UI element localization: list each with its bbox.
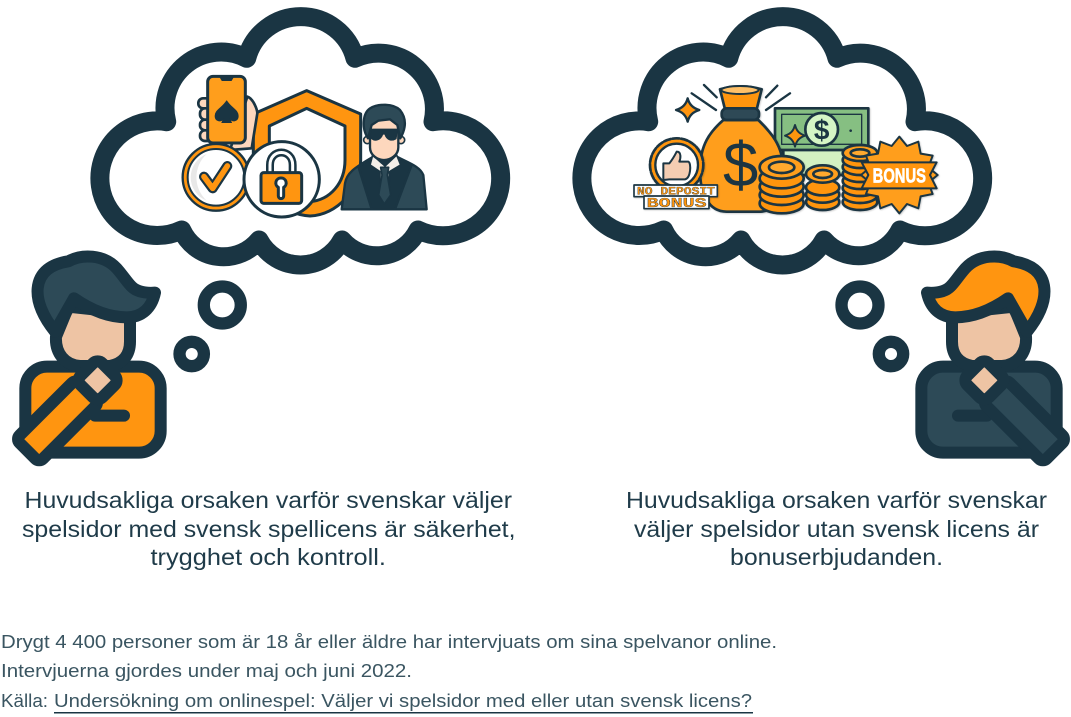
icon: no deposit bonus badge <box>634 138 717 212</box>
icon: hand holding phone <box>198 76 257 150</box>
person body <box>921 367 1057 453</box>
text block: right caption: bonuserbjudanden. <box>730 544 943 570</box>
person face <box>952 307 1026 366</box>
thought cloud right <box>582 17 983 265</box>
icon: padlock <box>244 142 319 217</box>
person hair <box>927 256 1044 332</box>
icon: security illustration <box>183 76 427 217</box>
icon: shield <box>253 91 361 216</box>
character: thinking person with orange hair <box>921 256 1066 463</box>
icon: bodyguard <box>342 105 427 209</box>
icon: bonus starburst <box>861 137 938 213</box>
person face <box>56 307 130 366</box>
text block: left caption: Huvudsakliga orsaken varför svenskar väljer <box>24 487 512 513</box>
icon: coin stacks <box>760 145 877 213</box>
icon: sparkle and rays <box>676 85 790 122</box>
icon: no deposit bonus badge: NO DEPOSIT <box>637 186 716 198</box>
thought cloud left <box>100 17 501 265</box>
thought bubble large left <box>204 286 241 324</box>
person forearm <box>983 379 1066 463</box>
icon: check badge <box>183 144 249 211</box>
icon: bonus illustration <box>634 85 938 213</box>
text block: right caption: väljer spelsidor utan svensk licens är <box>634 516 1039 542</box>
icon: banknote: $ <box>814 114 830 145</box>
text block: survey notes and source <box>1 631 777 714</box>
icon: money bag: $ <box>723 131 758 201</box>
icon: bonus starburst: BONUS <box>873 166 926 188</box>
person forearm <box>16 379 99 463</box>
text block: left caption: spelsidor med svensk spellicens är säkerhet, <box>22 516 516 542</box>
text block: left caption: trygghet och kontroll. <box>150 544 386 570</box>
person hand <box>963 359 1006 402</box>
person sleeve line <box>958 398 987 434</box>
thought bubble small left <box>180 342 204 366</box>
icon: no deposit bonus badge: BONUS <box>647 196 707 212</box>
person body <box>25 367 161 453</box>
thought bubble small right <box>879 342 903 366</box>
icon: money bag <box>700 86 783 212</box>
text block: right caption <box>626 487 1047 570</box>
thought bubble large right <box>842 286 878 324</box>
text block: survey notes and source: Drygt 4 400 personer som är 18 år eller äldre har intervjuats om sina spelvanor online. <box>1 631 777 652</box>
person hand <box>76 359 119 402</box>
icon: banknote <box>775 108 868 175</box>
text block: survey notes and source: Intervjuerna gjordes under maj och juni 2022. <box>1 660 412 681</box>
text block: survey notes and source: Undersökning om onlinespel: Väljer vi spelsidor med eller utan svensk licens? <box>54 690 752 711</box>
character: thinking person with orange sweater <box>16 256 161 463</box>
text block: right caption: Huvudsakliga orsaken varför svenskar <box>626 487 1047 513</box>
panel: left thought (licensed sites) <box>16 17 501 463</box>
person hair <box>38 256 155 332</box>
text block: survey notes and source: Källa: <box>1 690 48 711</box>
panel: right thought (unlicensed sites) <box>582 17 1066 463</box>
text block: left caption <box>22 487 516 570</box>
person sleeve line <box>95 398 124 434</box>
